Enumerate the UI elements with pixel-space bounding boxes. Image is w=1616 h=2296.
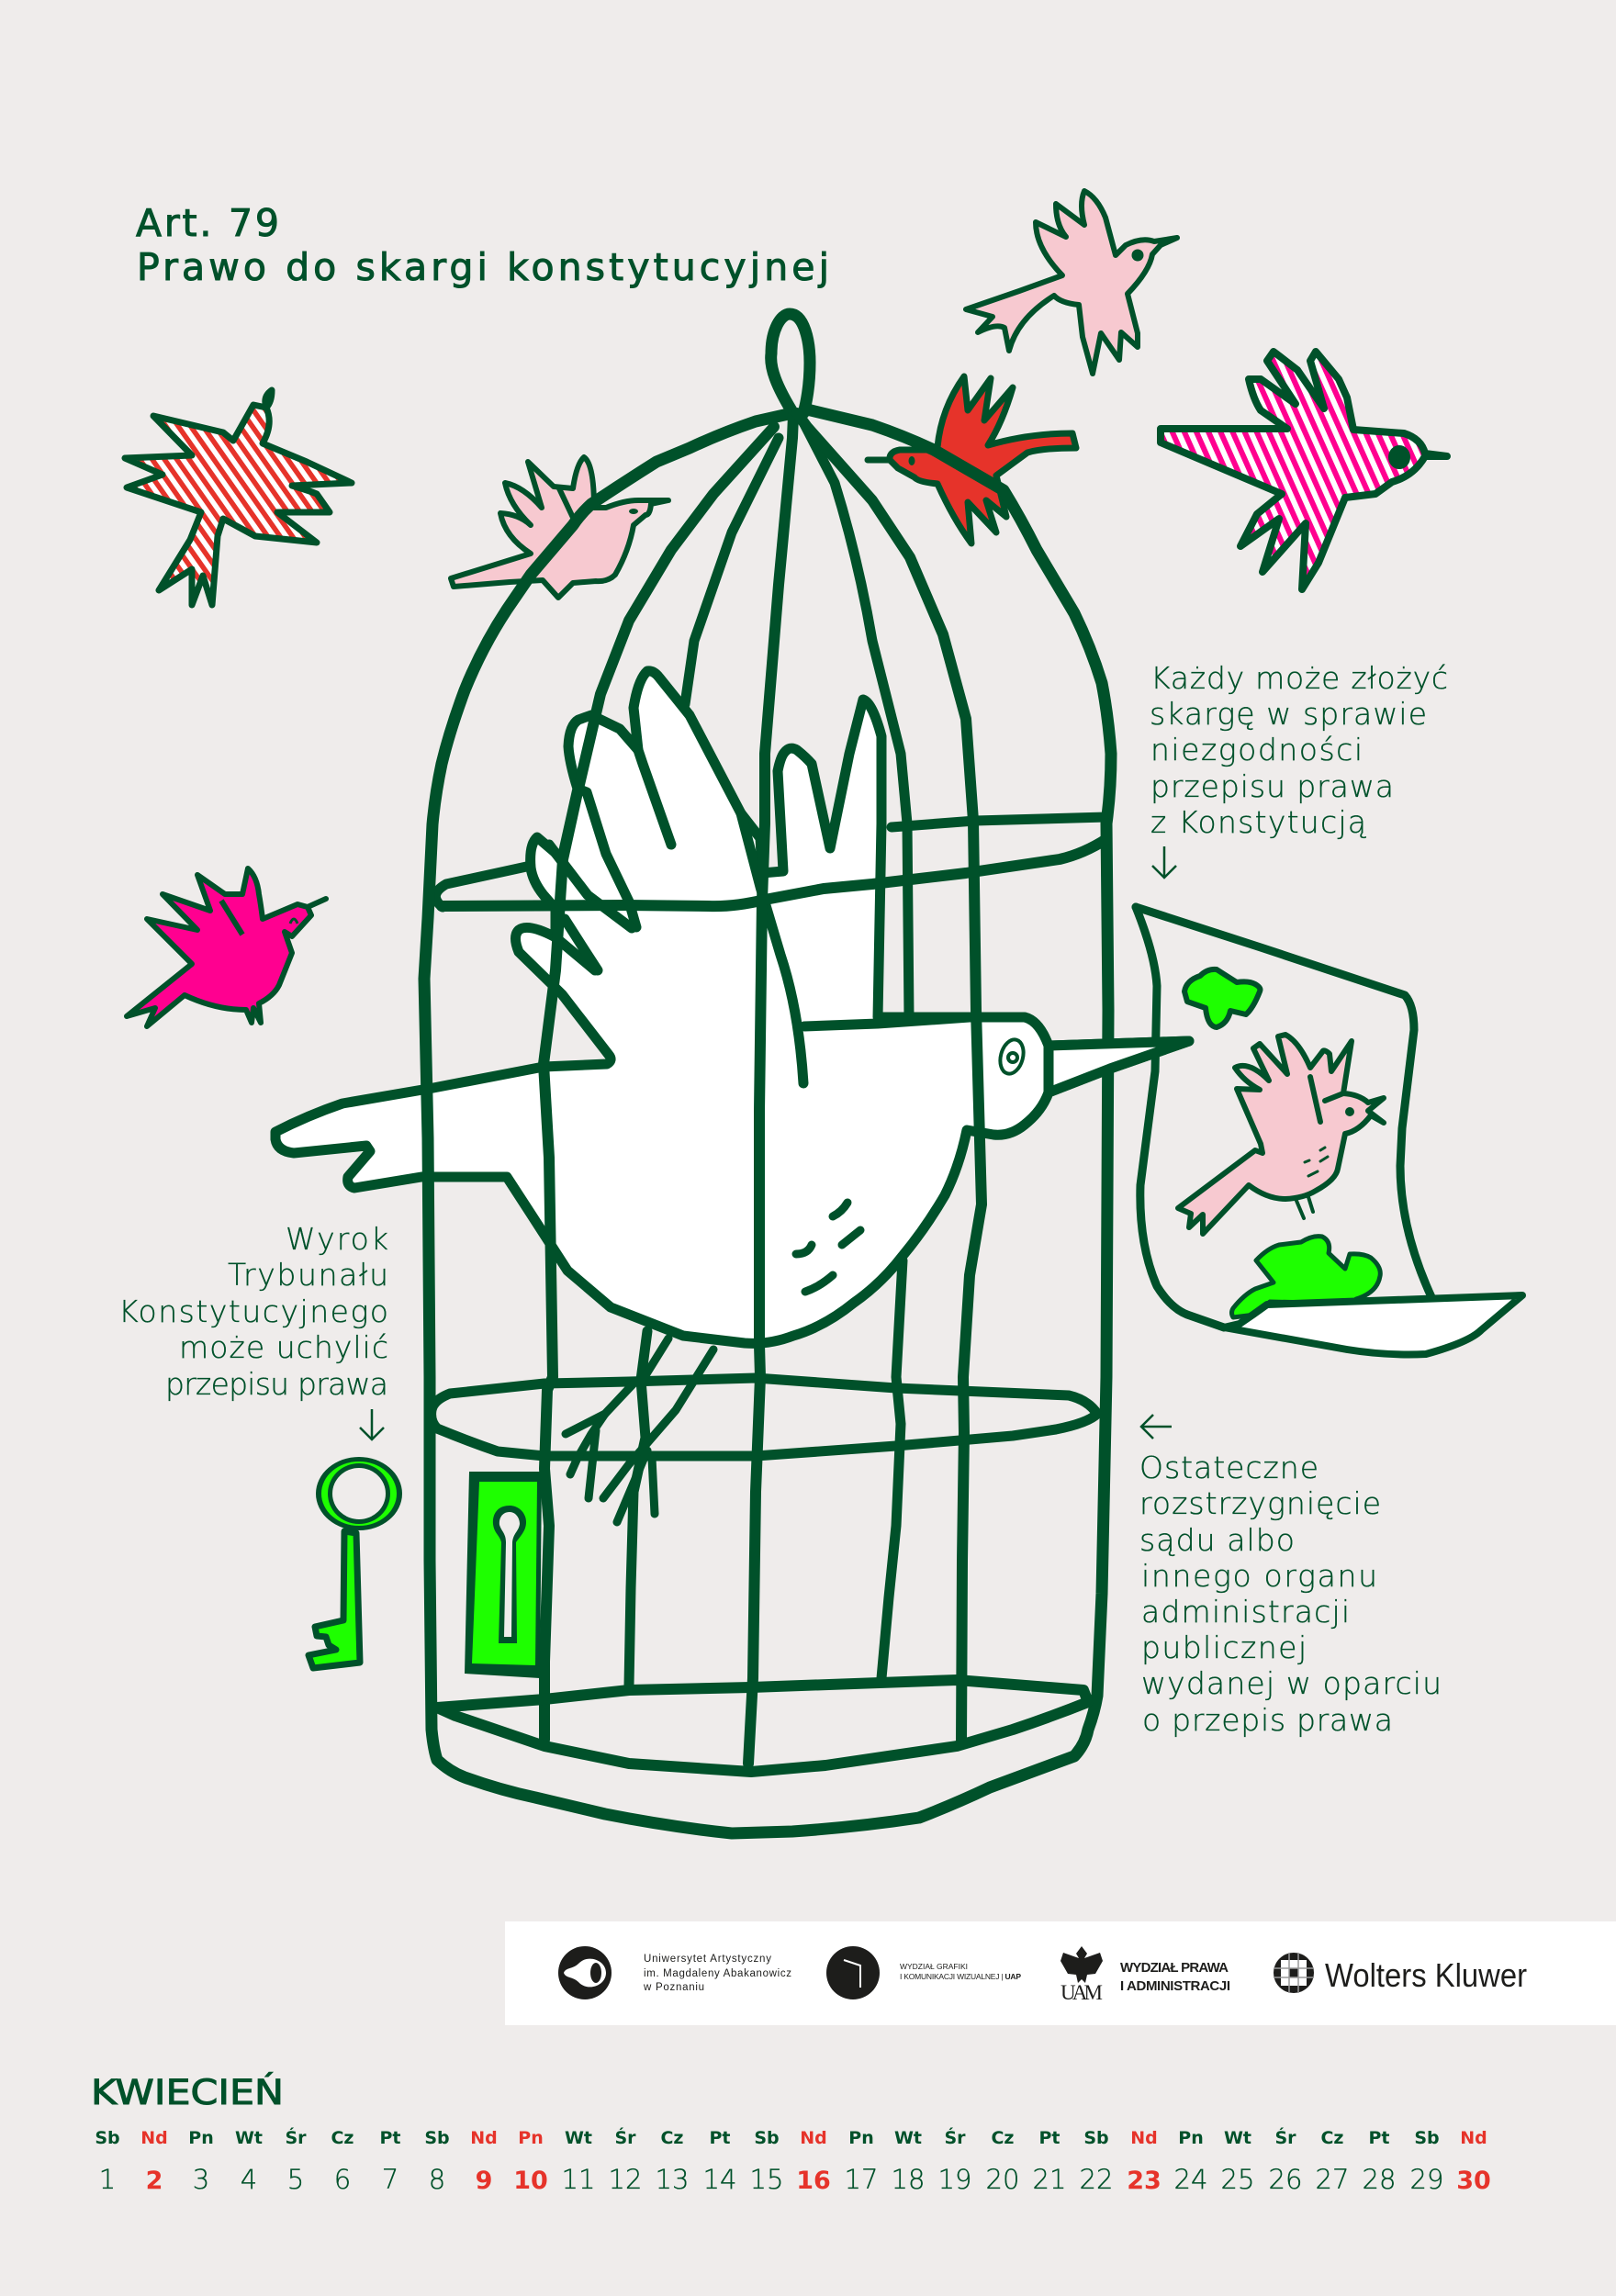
calendar weekdays: Cz xyxy=(660,2128,684,2148)
logo: university of arts: Uniwersytet Artystyczny xyxy=(644,1954,771,1965)
lower floor ring xyxy=(437,1680,1088,1772)
calendar weekdays: Sb xyxy=(95,2128,120,2148)
logo: UAM law faculty: I ADMINISTRACJI xyxy=(1120,1978,1230,1994)
calendar weekdays: Pn xyxy=(188,2128,214,2148)
calendar dates: 14 xyxy=(703,2164,736,2195)
green blob top xyxy=(1184,969,1260,1027)
calendar dates: 15 xyxy=(750,2164,783,2195)
belly marks xyxy=(796,1203,860,1292)
calendar weekdays: Pt xyxy=(1038,2128,1060,2148)
text: right upper callout: przepisu prawa xyxy=(1150,768,1394,804)
cage hanging loop xyxy=(771,314,810,415)
icon: key xyxy=(309,1457,402,1668)
icon: pink bird on cage xyxy=(451,457,668,598)
text: right upper callout: z Konstytucją xyxy=(1150,804,1366,840)
icon: striped red bird xyxy=(125,390,352,605)
calendar weekdays: Cz xyxy=(1320,2128,1344,2148)
calendar dates: 9 xyxy=(476,2167,492,2195)
calendar weekdays: Pn xyxy=(848,2128,874,2148)
calendar weekdays: Wt xyxy=(894,2128,922,2148)
calendar dates: 8 xyxy=(429,2164,445,2195)
text: right lower callout: wydanej w oparciu xyxy=(1141,1665,1442,1701)
title xyxy=(136,201,829,289)
cage bar left xyxy=(544,427,774,1740)
icon: red bird on cage xyxy=(868,376,1076,543)
text: right lower callout: administracji xyxy=(1141,1594,1350,1630)
text: right lower callout: sądu albo xyxy=(1139,1522,1295,1558)
logo: UAM law faculty: UAM xyxy=(1060,1981,1103,2004)
icon: door with keyhole xyxy=(465,1472,542,1678)
calendar dates: 2 xyxy=(146,2167,163,2195)
eye xyxy=(996,1037,1027,1076)
logo: graphics faculty: WYDZIAŁ GRAFIKI xyxy=(900,1962,968,1971)
pink bird on paper xyxy=(1178,1035,1384,1234)
wing and feather lines xyxy=(549,750,1055,1088)
calendar dates: 11 xyxy=(562,2164,595,2195)
calendar dates xyxy=(99,2164,1491,2195)
icon: striped magenta bird xyxy=(1161,352,1447,589)
calendar weekdays: Cz xyxy=(331,2128,354,2148)
calendar dates: 5 xyxy=(287,2164,304,2195)
text: right upper callout: niezgodności xyxy=(1150,732,1363,767)
calendar weekdays: Śr xyxy=(614,2126,636,2148)
calendar dates: 12 xyxy=(609,2164,642,2195)
logo: university of arts xyxy=(558,1946,791,1999)
text: right lower callout: Ostateczne xyxy=(1139,1450,1319,1485)
calendar weekdays: Śr xyxy=(1274,2126,1296,2148)
calendar dates: 10 xyxy=(513,2167,548,2195)
calendar dates: 24 xyxy=(1174,2164,1207,2195)
calendar dates: 27 xyxy=(1316,2164,1349,2195)
calendar heading: KWIECIEŃ xyxy=(91,2072,284,2112)
calendar dates: 29 xyxy=(1410,2164,1443,2195)
calendar weekdays: Śr xyxy=(285,2126,307,2148)
calendar weekdays: Pt xyxy=(1368,2128,1390,2148)
calendar dates: 26 xyxy=(1269,2164,1302,2195)
calendar weekdays: Sb xyxy=(754,2128,780,2148)
calendar dates: 1 xyxy=(99,2164,116,2195)
arrow: down to key xyxy=(360,1409,384,1439)
logo: graphics faculty xyxy=(826,1946,1021,1999)
calendar weekdays: Nd xyxy=(1130,2128,1158,2148)
upper ring front xyxy=(442,823,1106,906)
text: left callout: Wyrok xyxy=(286,1221,388,1257)
paper curl xyxy=(1224,1295,1522,1354)
calendar weekdays: Nd xyxy=(140,2128,168,2148)
icon: magenta bird xyxy=(127,868,326,1026)
calendar dates: 18 xyxy=(892,2164,925,2195)
cage: front structure xyxy=(424,314,1111,1833)
text: right upper callout: Każdy może złożyć xyxy=(1150,660,1448,696)
logo: UAM law faculty: WYDZIAŁ PRAWA xyxy=(1120,1960,1229,1976)
calendar weekdays: Pn xyxy=(1178,2128,1204,2148)
logo: university of arts: im. Magdaleny Abakanowicz xyxy=(644,1968,791,1979)
text: right upper callout: skargę w sprawie xyxy=(1150,696,1427,732)
text: left callout: Konstytucyjnego xyxy=(118,1294,388,1329)
calendar weekdays: Sb xyxy=(424,2128,450,2148)
calendar dates: 13 xyxy=(656,2164,689,2195)
calendar weekdays: Śr xyxy=(944,2126,966,2148)
text: right lower callout: o przepis prawa xyxy=(1142,1702,1393,1738)
calendar dates: 6 xyxy=(334,2164,351,2195)
calendar dates: 20 xyxy=(986,2164,1019,2195)
calendar weekdays: Wt xyxy=(235,2128,263,2148)
title: Prawo do skargi konstytucyjnej xyxy=(137,245,829,289)
text: right upper callout xyxy=(1150,660,1448,840)
arrow: left to door xyxy=(1141,1415,1172,1439)
calendar weekdays: Pt xyxy=(379,2128,401,2148)
calendar dates: 28 xyxy=(1363,2164,1396,2195)
bird legs xyxy=(566,1338,713,1522)
calendar dates: 19 xyxy=(938,2164,971,2195)
white bird xyxy=(275,671,1189,1343)
icon: document with bird xyxy=(1136,907,1522,1354)
green blob bottom xyxy=(1232,1237,1380,1317)
calendar weekdays: Cz xyxy=(991,2128,1015,2148)
logo: UAM law faculty xyxy=(1060,1946,1230,2004)
calendar dates: 22 xyxy=(1080,2164,1113,2195)
calendar dates: 3 xyxy=(193,2164,209,2195)
beak over paper xyxy=(1049,1041,1189,1092)
logo: Wolters Kluwer: Wolters Kluwer xyxy=(1325,1956,1527,1994)
calendar weekdays: Nd xyxy=(1460,2128,1487,2148)
calendar dates: 30 xyxy=(1456,2167,1491,2195)
title: Art. 79 xyxy=(136,201,279,245)
text: left callout: Trybunału xyxy=(228,1257,388,1293)
calendar weekdays xyxy=(95,2126,1487,2148)
logo: university of arts: w Poznaniu xyxy=(643,1982,704,1993)
calendar weekdays: Pn xyxy=(518,2128,544,2148)
calendar weekdays: Wt xyxy=(1224,2128,1251,2148)
cage dome and outer frame xyxy=(424,409,1111,1833)
calendar dates: 16 xyxy=(796,2167,831,2195)
paper outline xyxy=(1136,907,1432,1299)
calendar dates: 23 xyxy=(1127,2167,1162,2195)
text: left callout xyxy=(118,1221,388,1402)
calendar weekdays: Nd xyxy=(470,2128,498,2148)
calendar weekdays: Wt xyxy=(565,2128,592,2148)
icon: pink bird top right xyxy=(966,191,1177,374)
calendar dates: 25 xyxy=(1221,2164,1254,2195)
calendar dates: 4 xyxy=(241,2164,257,2195)
cage: back bars xyxy=(432,424,1106,1686)
logo band xyxy=(505,1921,1616,2025)
text: right lower callout: publicznej xyxy=(1141,1630,1307,1665)
bird body and wings xyxy=(275,671,1189,1343)
cage bar centre xyxy=(748,415,793,1764)
calendar weekdays: Nd xyxy=(800,2128,827,2148)
calendar dates: 17 xyxy=(845,2164,878,2195)
logo: graphics faculty: I KOMUNIKACJI WIZUALNEJ | UAP xyxy=(900,1972,1021,1981)
calendar weekdays: Sb xyxy=(1083,2128,1109,2148)
text: right lower callout: innego organu xyxy=(1141,1558,1377,1594)
calendar dates: 7 xyxy=(382,2164,398,2195)
logo: Wolters Kluwer xyxy=(1274,1953,1527,1994)
cage bar right xyxy=(797,413,982,1743)
calendar weekdays: Pt xyxy=(709,2128,731,2148)
calendar weekdays: Sb xyxy=(1414,2128,1440,2148)
text: left callout: może uchylić xyxy=(179,1329,388,1365)
text: right lower callout xyxy=(1139,1450,1442,1738)
arrow: down to document xyxy=(1152,846,1176,878)
text: left callout: przepisu prawa xyxy=(165,1366,388,1402)
text: right lower callout: rozstrzygnięcie xyxy=(1139,1485,1381,1521)
calendar dates: 21 xyxy=(1033,2164,1066,2195)
